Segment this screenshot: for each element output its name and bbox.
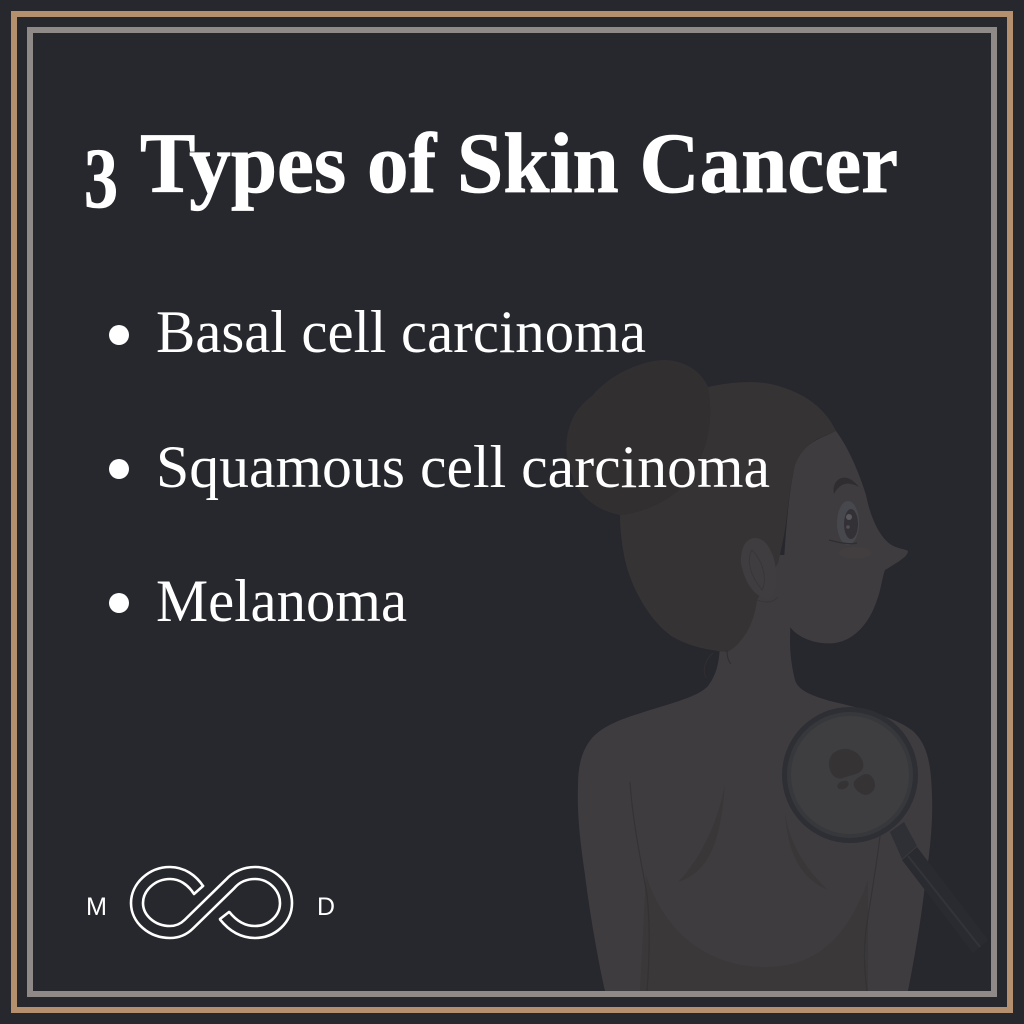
bullet item: basal cell carcinoma: Basal cell carcinoma bbox=[156, 299, 646, 365]
eyebrow bbox=[834, 478, 859, 494]
left shoulder blade shadow bbox=[678, 783, 725, 882]
bullet item: melanoma: Melanoma bbox=[156, 568, 407, 634]
eye bbox=[829, 501, 859, 545]
title: Types of Skin Cancer bbox=[140, 115, 898, 211]
illustration: woman seen from behind with magnifier bbox=[566, 360, 988, 991]
logo letter D: D bbox=[317, 893, 335, 921]
magnifying glass lens bbox=[782, 707, 918, 843]
ear detail bbox=[749, 550, 768, 602]
hair bbox=[620, 382, 836, 652]
right shoulder blade shadow bbox=[785, 813, 828, 890]
lower back shading bbox=[640, 875, 868, 991]
face bbox=[783, 431, 908, 643]
logo: M infinity D bbox=[86, 873, 335, 932]
lesion spots bbox=[829, 749, 875, 795]
nape hairs bbox=[704, 650, 731, 678]
title: 3 bbox=[84, 130, 118, 226]
right arm crease bbox=[868, 836, 880, 918]
hair bun bbox=[566, 360, 713, 515]
cheek blush bbox=[839, 547, 871, 559]
bullet list bbox=[109, 299, 770, 634]
ear bbox=[741, 538, 776, 600]
body and neck bbox=[578, 555, 932, 991]
magnifying glass handle bbox=[890, 822, 980, 948]
bullet item: squamous cell carcinoma: Squamous cell carcinoma bbox=[156, 434, 770, 500]
logo letter M: M bbox=[86, 893, 107, 921]
logo infinity mark bbox=[137, 873, 286, 932]
left arm crease bbox=[630, 782, 646, 888]
